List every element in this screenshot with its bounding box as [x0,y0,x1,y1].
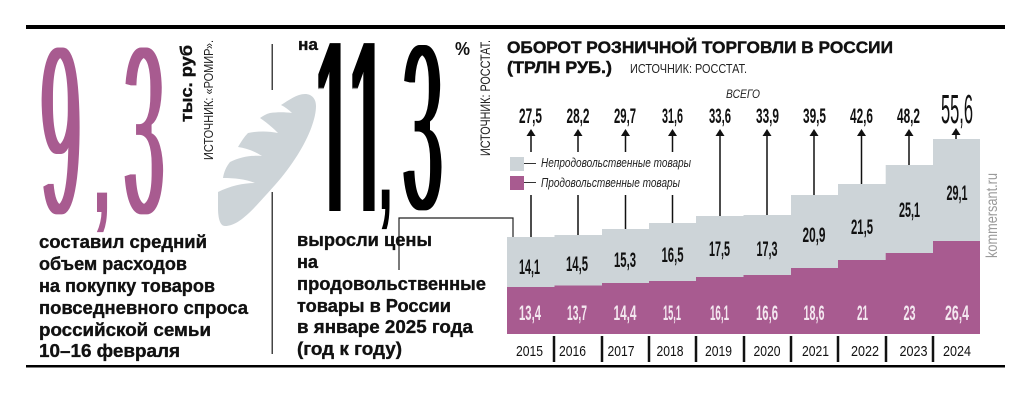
totals row: 33,9 [756,105,779,128]
year axis: 2020 [754,343,780,360]
year axis: 2017 [608,343,634,360]
stacked area: non-food goods [507,139,980,334]
non-food value labels [519,182,968,279]
food value labels: 16,1 [710,302,729,325]
description: left text block [39,232,249,361]
description: middle text block: в январе 2025 года [297,317,474,337]
stacked area: food goods [507,241,980,334]
chart title: (ТРЛН РУБ.) [507,58,612,77]
year axis: 2015 [516,343,543,360]
label: всего: ВСЕГО [726,87,760,101]
big number: 9,3 [41,0,164,269]
big number: 11,3: 3 [403,0,442,265]
description: left text block: на покупку товаров [39,276,215,296]
big number: 9,3: , [92,96,112,241]
totals row: 42,6 [850,105,873,128]
year axis: 2019 [705,343,732,360]
icon: bread loaf [218,94,316,226]
year axis: 2024 [943,343,971,360]
year axis [516,343,971,360]
year axis: 2018 [656,343,684,360]
big number: 9,3: 9 [41,0,81,269]
non-food value labels: 14,5 [566,253,588,276]
year axis: 2016 [559,343,586,360]
year axis: 2023 [900,343,928,360]
chart title: ОБОРОТ РОЗНИЧНОЙ ТОРГОВЛИ В РОССИИ [507,38,893,57]
connector line [399,218,513,270]
food value labels: 13,7 [567,302,587,325]
non-food value labels: 16,5 [662,244,684,267]
food value labels: 26,4 [945,302,969,325]
chart source: ИСТОЧНИК: РОССТАТ. [630,61,747,76]
chart title [507,38,893,77]
non-food value labels: 17,5 [709,238,730,261]
non-food value labels: 17,3 [756,238,778,261]
food value labels: 21 [857,302,868,325]
totals row: 48,2 [897,105,920,128]
totals row: 31,6 [662,105,683,128]
non-food value labels: 15,3 [614,249,636,272]
year axis: 2022 [851,343,879,360]
food value labels: 23 [904,302,916,325]
food value labels: 13,4 [519,302,541,325]
legend: Непродовольственные товары [541,156,691,170]
food value labels: 16,6 [756,302,778,325]
totals row: 39,5 [803,105,826,128]
totals row: 33,6 [709,105,731,128]
big number: 9,3: 3 [124,0,164,269]
food value labels: 15,1 [663,302,681,325]
arrows from chart to totals [526,128,960,237]
text: 55,6 [941,86,973,132]
label: на: на [298,35,319,54]
description: left text block: российской семьи [39,320,211,340]
description: middle text block: продовольственные [297,274,486,294]
non-food value labels: 14,1 [519,256,540,279]
food value labels [519,302,969,325]
description: middle text block: на [297,252,319,272]
credit: kommersant.ru: kommersant.ru [984,173,1001,258]
legend [510,156,691,190]
legend: Продовольственные товары [541,176,680,190]
totals row [519,105,920,128]
source: Росстат: ИСТОЧНИК: РОССТАТ. [477,40,493,156]
food value labels: 14,4 [614,302,637,325]
description: left text block: составил средний [39,232,207,252]
totals row: 29,7 [614,105,636,128]
non-food value labels: 20,9 [802,224,826,247]
percent sign: % [455,39,470,59]
description: middle text block: (год к году) [297,339,402,359]
description: left text block: 10–16 февраля [39,341,180,361]
totals row: 28,2 [566,105,590,128]
description: left text block: повседневного спроса [39,298,249,318]
food value labels: 18,6 [804,302,824,325]
source: Ромир: ИСТОЧНИК: «РОМИР». [201,40,216,160]
description: left text block: объем расходов [39,254,187,274]
totals row: 27,5 [519,105,542,128]
description: middle text block [297,230,486,359]
non-food value labels: 21,5 [851,216,873,239]
description: middle text block: выросли цены [297,230,432,250]
non-food value labels: 25,1 [899,199,920,222]
unit: тыс. руб: тыс. руб [177,45,196,122]
year axis: 2021 [802,343,829,360]
non-food value labels: 29,1 [946,182,968,205]
big number: 11,3: , [378,93,393,238]
big number: 11,3 [318,43,442,230]
description: middle text block: товары в России [297,296,451,316]
